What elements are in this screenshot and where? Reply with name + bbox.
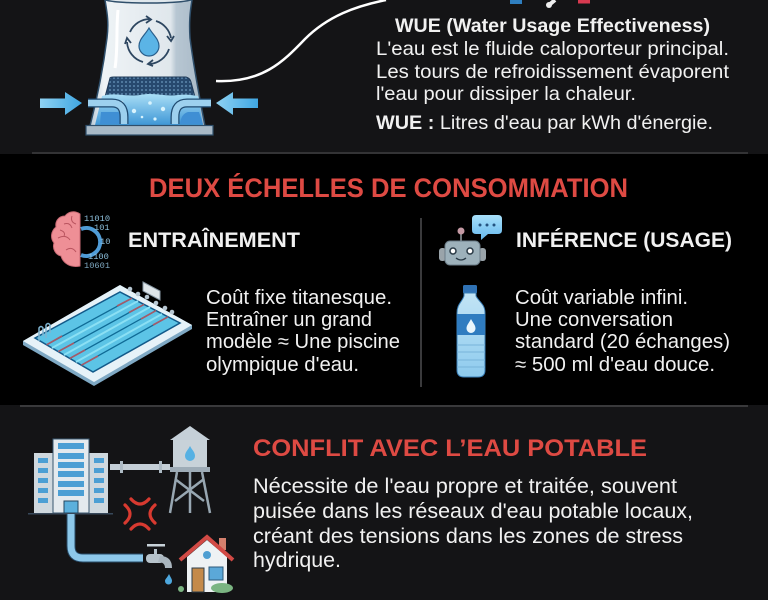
icon: pipe to faucet bbox=[71, 514, 172, 584]
icon: brain and data: 1100 bbox=[88, 252, 109, 262]
icon: conflict symbol bbox=[125, 499, 155, 529]
icon: recycling arrows around drop bbox=[125, 16, 174, 66]
text block: inference cost: ≈ 500 ml d'eau douce. bbox=[515, 354, 715, 376]
icon: olympic swimming pool bbox=[23, 282, 192, 386]
heading: two scales: DEUX ÉCHELLES DE CONSOMMATION bbox=[149, 173, 628, 203]
icon: brain and data: 10601 bbox=[84, 261, 110, 271]
icon: water tower bbox=[170, 426, 210, 513]
text block: training cost: Entraîner un grand bbox=[206, 309, 372, 331]
text block: inference cost: standard (20 échanges) bbox=[515, 331, 730, 353]
heading: inference: INFÉRENCE (USAGE) bbox=[516, 229, 732, 252]
heading: drinking water conflict: CONFLIT AVEC L’EAU POTABLE bbox=[253, 435, 647, 462]
arrow: right inflow bbox=[216, 92, 258, 115]
icon: data center bbox=[28, 439, 113, 514]
icon: brain and data: 10 bbox=[100, 237, 110, 247]
text block: training cost bbox=[206, 287, 400, 376]
icon: partial top icons bbox=[510, 0, 590, 8]
panel: black consumption band bbox=[0, 154, 768, 405]
text block: WUE explanation: l'eau pour dissiper la chaleur. bbox=[376, 83, 636, 105]
text block: WUE explanation: Les tours de refroidissement évaporent bbox=[376, 61, 730, 83]
text block: drinking water conflict: créant des tensions dans les zones de stress bbox=[253, 525, 683, 548]
text block: training cost: olympique d'eau. bbox=[206, 354, 359, 376]
text block: drinking water conflict: Nécessite de l'eau propre et traitée, souvent bbox=[253, 475, 677, 498]
icon: chatbot robot bbox=[439, 215, 502, 265]
text block: WUE explanation: WUE : Litres d'eau par kWh d'énergie. bbox=[376, 113, 713, 134]
icon: brain and data: 101 bbox=[94, 223, 110, 233]
text block: inference cost: Coût variable infini. bbox=[515, 287, 688, 309]
text block: drinking water conflict bbox=[253, 475, 693, 572]
icon: brain and data bbox=[52, 212, 110, 271]
text block: training cost: Coût fixe titanesque. bbox=[206, 287, 392, 309]
text block: training cost: modèle ≈ Une piscine bbox=[206, 331, 400, 353]
text block: drinking water conflict: hydrique. bbox=[253, 549, 341, 572]
text block: drinking water conflict: puisée dans les réseaux d'eau potable locaux, bbox=[253, 500, 693, 523]
arrow: white connector curve bbox=[216, 0, 386, 81]
icon: cooling tower bbox=[86, 0, 213, 135]
text block: WUE explanation: WUE (Water Usage Effectiveness) bbox=[395, 16, 710, 37]
icon: water bottle bbox=[457, 285, 485, 377]
heading: training: ENTRAÎNEMENT bbox=[128, 228, 300, 252]
text block: inference cost bbox=[515, 287, 730, 376]
icon: brain and data: 11010 bbox=[84, 214, 110, 224]
text block: WUE explanation bbox=[376, 16, 730, 134]
icon: house bbox=[178, 537, 233, 593]
arrow: left inflow bbox=[40, 92, 82, 115]
text block: inference cost: Une conversation bbox=[515, 309, 673, 331]
icon: pipe from data center to water tower bbox=[110, 461, 170, 473]
text block: WUE explanation: L'eau est le fluide caloporteur principal. bbox=[376, 38, 729, 60]
